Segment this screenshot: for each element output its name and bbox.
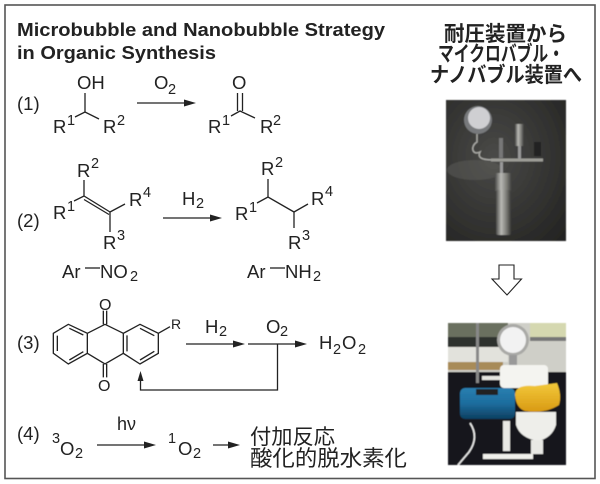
reaction 2: hydrogenation: R [129,189,142,210]
reaction 2: hydrogenation: 1 [249,200,257,216]
reaction 1: alcohol oxidation: 2 [168,82,176,98]
arrow: to products [213,442,240,448]
product labels: 付加反応 [250,426,335,449]
reaction 4: singlet oxygen: 2 [75,446,83,462]
anthraquinone structure: O [99,297,111,314]
reaction 2: hydrogenation: R [77,160,90,181]
arrow: O2 oxidation [137,100,196,106]
reaction 4: singlet oxygen: O [60,438,74,459]
reaction 1: alcohol oxidation: 1 [222,113,230,129]
anthraquinone structure: R [171,316,181,332]
reaction 2: hydrogenation: Ar [62,261,80,282]
reaction 2: hydrogenation: R [235,203,248,224]
arrow: O2 step [248,340,307,348]
reaction 2: hydrogenation: (2) [17,210,40,231]
arrow: H2 hydrogenation [163,214,222,222]
reaction 3: anthraquinone process: O [342,332,356,353]
reaction 3: anthraquinone process: 2 [219,324,227,340]
reaction 4: singlet oxygen: 3 [52,431,60,447]
reaction 2: hydrogenation: 2 [275,155,283,171]
reaction 2: hydrogenation: Ar [247,261,266,282]
reaction 1: alcohol oxidation: O [154,72,168,93]
reaction 1: alcohol oxidation: R [260,116,273,137]
reaction 1: alcohol oxidation: 1 [67,113,75,129]
reaction 2: hydrogenation: 3 [117,228,125,244]
reaction 3: anthraquinone process: H [205,316,218,337]
reaction 2: hydrogenation: 3 [302,228,310,244]
reaction 2: hydrogenation [17,155,333,285]
reaction 1: alcohol oxidation: OH [77,72,105,93]
reaction 2: hydrogenation: NH [285,261,312,282]
reaction 2: hydrogenation: 2 [130,269,138,285]
anthraquinone structure: O [98,378,110,395]
reaction 2: hydrogenation: 2 [196,196,204,212]
reaction 4: singlet oxygen: (4) [17,423,40,444]
reaction 2: hydrogenation: 4 [325,184,333,200]
reaction 3: anthraquinone process: 2 [280,324,288,340]
reaction 3: anthraquinone process: 2 [358,342,366,358]
reaction 1: alcohol oxidation: (1) [17,93,40,114]
anthraquinone structure [53,297,181,395]
photo: pressure-resistant apparatus [446,100,566,241]
reaction 2: hydrogenation: R [53,202,66,223]
arrow: H2 step [186,340,245,348]
reaction 4: singlet oxygen: 1 [168,431,176,447]
reaction 1: alcohol oxidation: O [232,72,246,93]
title [17,20,385,63]
product labels [250,426,407,471]
reaction 4: singlet oxygen: 2 [193,446,201,462]
reaction 3: anthraquinone process [17,297,366,395]
right heading: 耐圧装置から [444,23,567,46]
arrow: recycle loop [138,344,278,390]
title: in Organic Synthesis [17,43,216,63]
reaction 2: hydrogenation: 2 [91,156,99,172]
reaction 3: anthraquinone process: 2 [333,342,341,358]
reaction 2: hydrogenation: H [182,188,195,209]
reaction 1: alcohol oxidation: R [53,116,66,137]
reaction 2: hydrogenation: R [288,232,301,253]
reaction 3: anthraquinone process: (3) [17,332,40,353]
reaction 2: hydrogenation: R [261,158,274,179]
reaction 4: singlet oxygen [17,414,407,471]
title: Microbubble and Nanobubble Strategy [17,20,385,40]
reaction 2: hydrogenation: NO [100,261,128,282]
reaction 1: alcohol oxidation [17,72,281,137]
right heading: ナノバブル装置へ [430,63,582,87]
product labels: 酸化的脱水素化 [250,446,407,471]
reaction 1: alcohol oxidation: 2 [273,113,281,129]
reaction 4: singlet oxygen: O [178,438,192,459]
reaction 2: hydrogenation: R [311,188,324,209]
reaction 2: hydrogenation: 1 [67,199,75,215]
reaction 3: anthraquinone process: O [266,316,280,337]
right heading [430,23,582,87]
reaction 2: hydrogenation: 4 [143,185,151,201]
photo: microbubble and nanobubble apparatus [448,323,566,465]
arrow: photoexcitation [97,442,156,448]
reaction 1: alcohol oxidation: R [208,116,221,137]
reaction 2: hydrogenation: R [103,232,116,253]
reaction 3: anthraquinone process: H [319,332,332,353]
reaction 4: singlet oxygen: hν [117,414,136,434]
reaction 2: hydrogenation: 2 [313,269,321,285]
reaction 1: alcohol oxidation: 2 [117,113,125,129]
arrow: outline down arrow [492,265,522,295]
reaction 1: alcohol oxidation: R [103,116,116,137]
